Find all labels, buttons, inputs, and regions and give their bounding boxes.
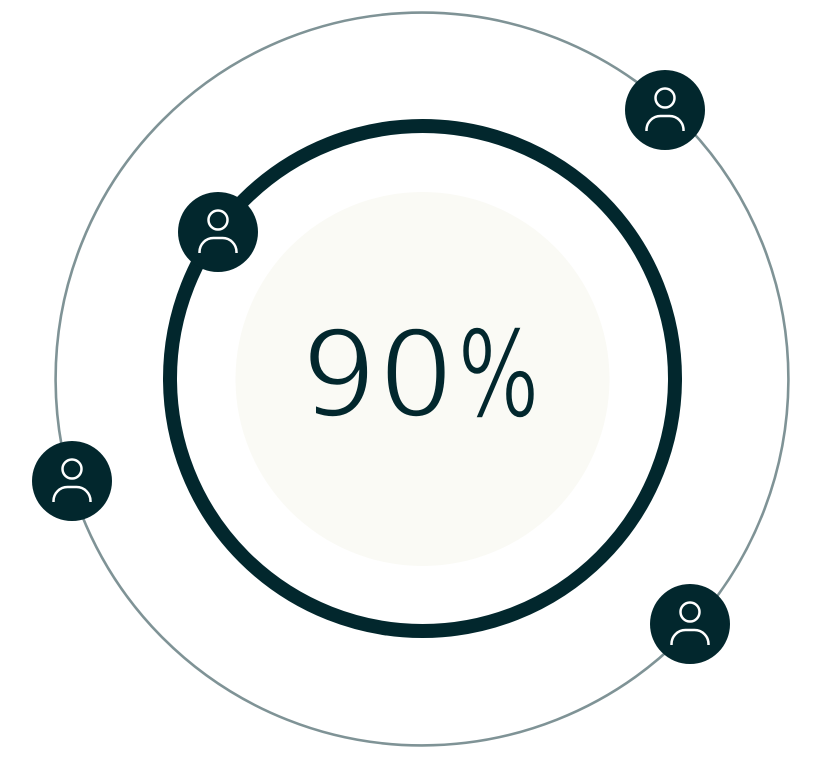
icon: person bottom right [650, 584, 730, 664]
percentage value: % [458, 306, 539, 446]
icon: person on inner ring [178, 192, 258, 272]
icon: person left [32, 441, 112, 521]
inner thick ring [170, 126, 675, 631]
center pale disc [236, 192, 610, 566]
percentage value: 9 [301, 306, 377, 446]
percentage value: 0 [378, 306, 454, 446]
icon: person top right [625, 70, 705, 150]
